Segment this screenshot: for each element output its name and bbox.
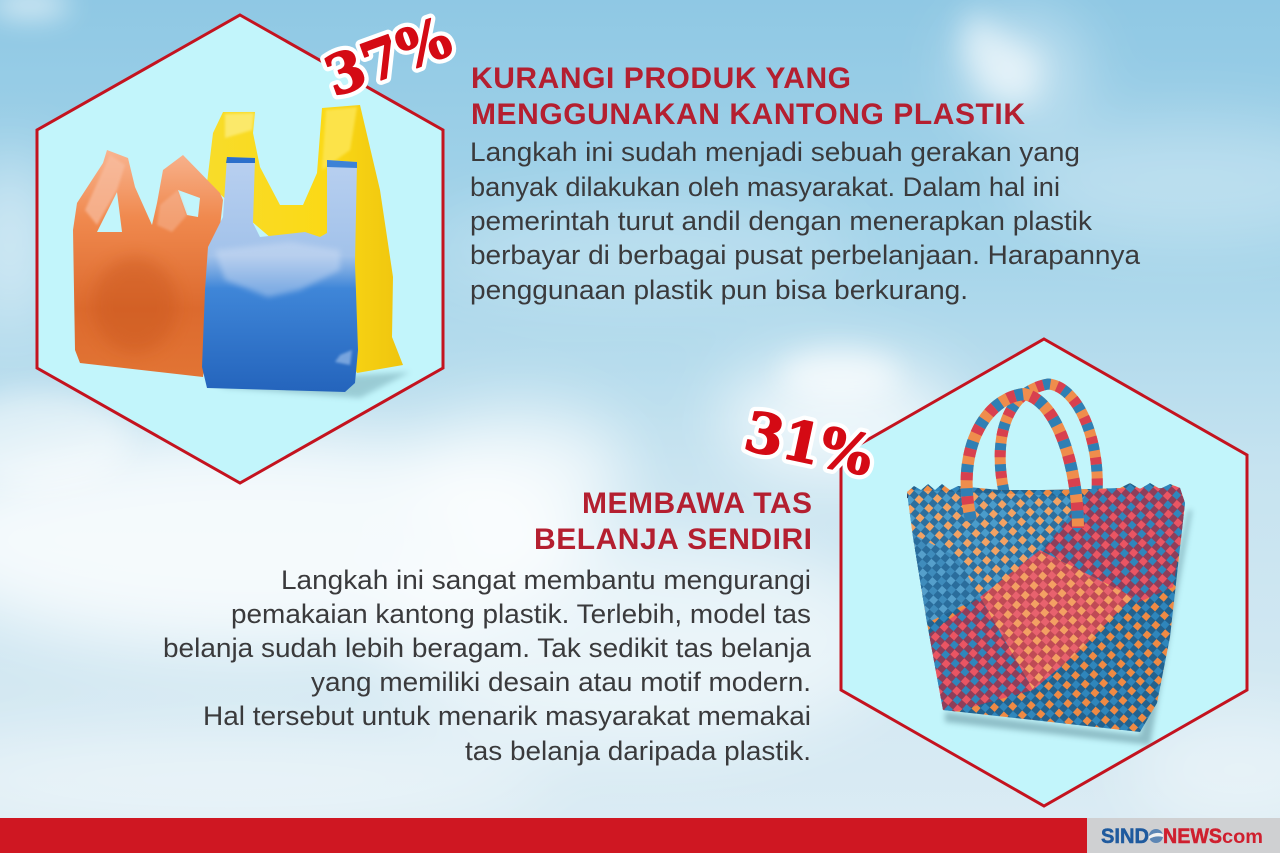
icon: plastic bags	[73, 105, 410, 398]
text block: reduce plastic bag products: Langkah ini sudah menjadi sebuah gerakan yang	[470, 136, 1080, 167]
text block: bring your own shopping bag: belanja sudah lebih beragam. Tak sedikit tas belanja	[163, 632, 812, 663]
heading: bring your own shopping bag: BELANJA SENDIRI	[534, 523, 812, 556]
heading: bring your own shopping bag: MEMBAWA TAS	[582, 487, 812, 520]
text block: bring your own shopping bag: Langkah ini sangat membantu mengurangi	[281, 564, 811, 595]
text block: reduce plastic bag products	[470, 136, 1141, 305]
orange bag	[73, 150, 223, 377]
text block: bring your own shopping bag: yang memiliki desain atau motif modern.	[311, 666, 811, 697]
icon: woven shopping bag	[900, 384, 1200, 745]
heading: reduce plastic bag products: KURANGI PRODUK YANG	[471, 62, 851, 95]
logo: SINDONEWS.com	[1087, 818, 1280, 853]
callout: 37%: 37%	[316, 4, 459, 109]
basket body	[907, 483, 1185, 732]
footer bar	[0, 818, 1087, 853]
callout: 31%: 31%	[739, 398, 879, 488]
text block: bring your own shopping bag: pemakaian kantong plastik. Terlebih, model tas	[231, 598, 811, 629]
text block: reduce plastic bag products: pemerintah turut andil dengan menerapkan plastik	[470, 205, 1092, 236]
basket interior rim	[907, 488, 1180, 500]
back handle	[1000, 384, 1097, 492]
blue bag	[202, 157, 358, 392]
callout: 31%: 31%	[739, 398, 879, 488]
text block: bring your own shopping bag: tas belanja daripada plastik.	[465, 735, 811, 766]
text block: bring your own shopping bag: Hal tersebut untuk menarik masyarakat memakai	[203, 700, 811, 731]
heading: bring your own shopping bag	[534, 487, 812, 556]
logo: SINDONEWS.com: com	[1222, 827, 1263, 848]
yellow bag	[207, 105, 403, 373]
text block: reduce plastic bag products: banyak dilakukan oleh masyarakat. Dalam hal ini	[470, 171, 1060, 202]
text block: reduce plastic bag products: berbayar di berbagai pusat perbelanjaan. Harapannya	[470, 239, 1141, 270]
logo: SINDONEWS.com: NEWS	[1163, 825, 1222, 848]
panel: hexagon 31%	[841, 339, 1247, 806]
heading: reduce plastic bag products: MENGGUNAKAN KANTONG PLASTIK	[471, 98, 1025, 131]
front handle	[967, 394, 1078, 528]
text block: reduce plastic bag products: penggunaan plastik pun bisa berkurang.	[470, 274, 968, 305]
heading: reduce plastic bag products	[471, 62, 1025, 131]
panel: hexagon 37%	[37, 15, 443, 483]
text block: bring your own shopping bag	[163, 564, 812, 766]
logo: SINDONEWS.com: SIND	[1101, 825, 1149, 848]
callout: 37%: 37%	[316, 4, 459, 109]
